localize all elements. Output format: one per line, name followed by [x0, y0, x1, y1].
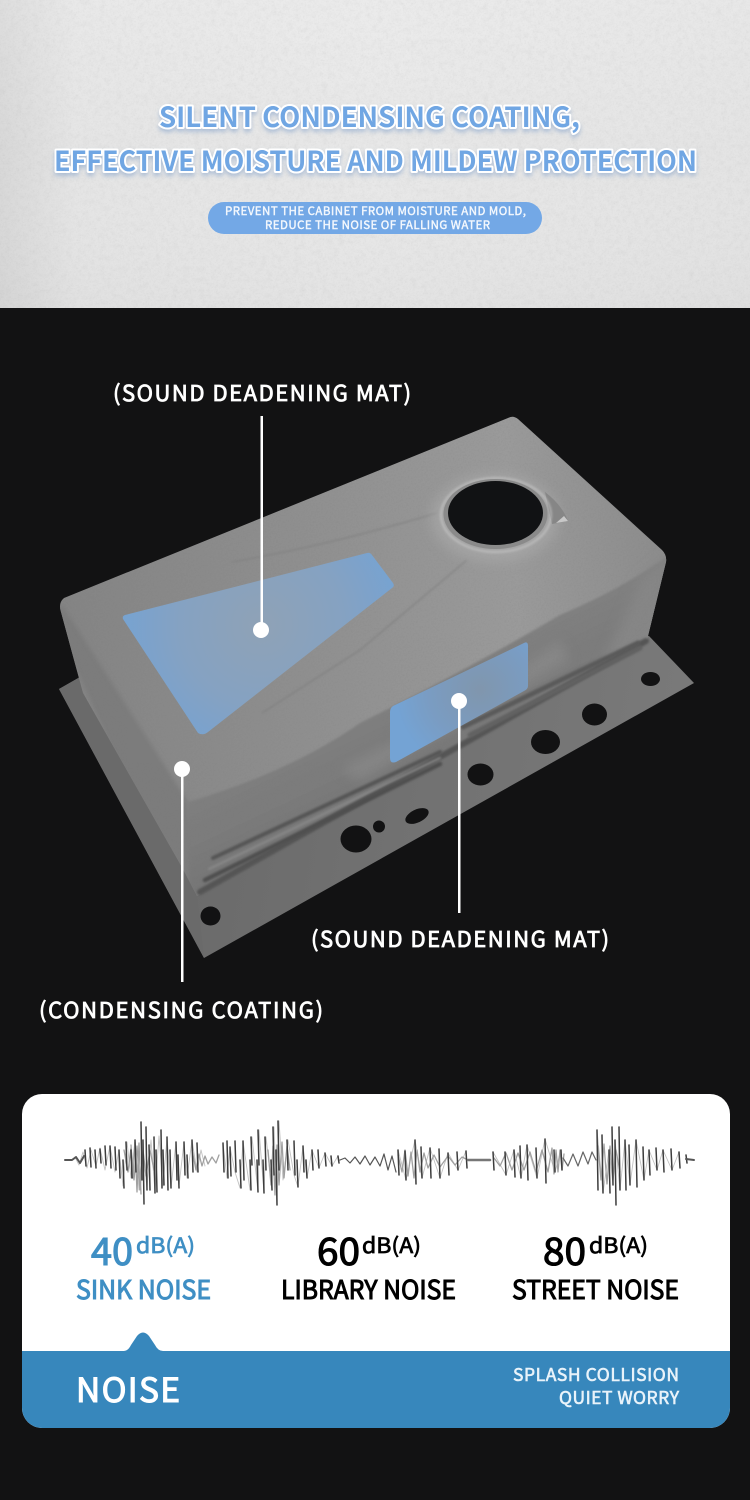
panel: header wall banner [0, 0, 750, 308]
drain hole [431, 474, 568, 562]
subtitle pill: REDUCE THE NOISE OF FALLING WATER [265, 217, 490, 233]
label: condensing coating: (CONDENSING COATING) [39, 993, 323, 1025]
footer heading: NOISE [76, 1363, 180, 1412]
stat: library noise: dB(A) [362, 1230, 421, 1260]
sink body [50, 400, 680, 910]
stat: sink noise [76, 1221, 211, 1307]
flange [59, 636, 694, 958]
title: SILENT CONDENSING COATING, [159, 96, 580, 136]
flange holes [200, 672, 660, 926]
stat: library noise [281, 1221, 456, 1307]
flange inner shadow [59, 677, 204, 958]
light patch on front wall [354, 650, 562, 774]
sound deadening mat: front wall [390, 642, 528, 762]
panel: noise comparison card [22, 1094, 730, 1428]
subtitle pill: PREVENT THE CABINET FROM MOISTURE AND MOLD, [225, 203, 526, 219]
footer caption [513, 1362, 680, 1410]
stat: street noise: dB(A) [589, 1230, 648, 1260]
sound deadening mat: top face [123, 553, 394, 734]
stat: library noise: 60 [317, 1221, 360, 1276]
sink illustration [50, 400, 694, 958]
grain [50, 400, 680, 910]
callout: top mat [113, 376, 411, 638]
footer caption: SPLASH COLLISION [513, 1362, 679, 1387]
stiffening ridge on front wall [200, 641, 646, 892]
right end shading [612, 569, 664, 650]
stat: sink noise: dB(A) [136, 1230, 195, 1260]
blue footer band with pointer [22, 1332, 730, 1428]
subtitle pill [208, 202, 542, 234]
callout: front mat [311, 693, 609, 954]
stat: library noise: LIBRARY NOISE [281, 1270, 456, 1307]
stat: street noise [512, 1221, 679, 1307]
stat: street noise: 80 [543, 1221, 586, 1276]
title [54, 96, 697, 180]
title: EFFECTIVE MOISTURE AND MILDEW PROTECTION [54, 140, 697, 180]
label: top sound deadening mat: (SOUND DEADENING MAT) [113, 376, 411, 408]
waveform chart [65, 1121, 694, 1205]
label: front sound deadening mat: (SOUND DEADENING MAT) [311, 922, 609, 954]
left wall [60, 608, 189, 880]
front wall [188, 556, 668, 905]
callout: condensing coating [39, 761, 323, 1025]
crease lines on top face [232, 513, 467, 713]
stat: sink noise: SINK NOISE [76, 1270, 211, 1307]
stat: street noise: STREET NOISE [512, 1270, 679, 1307]
footer caption: QUIET WORRY [559, 1385, 680, 1410]
stat: sink noise: 40 [91, 1221, 133, 1276]
